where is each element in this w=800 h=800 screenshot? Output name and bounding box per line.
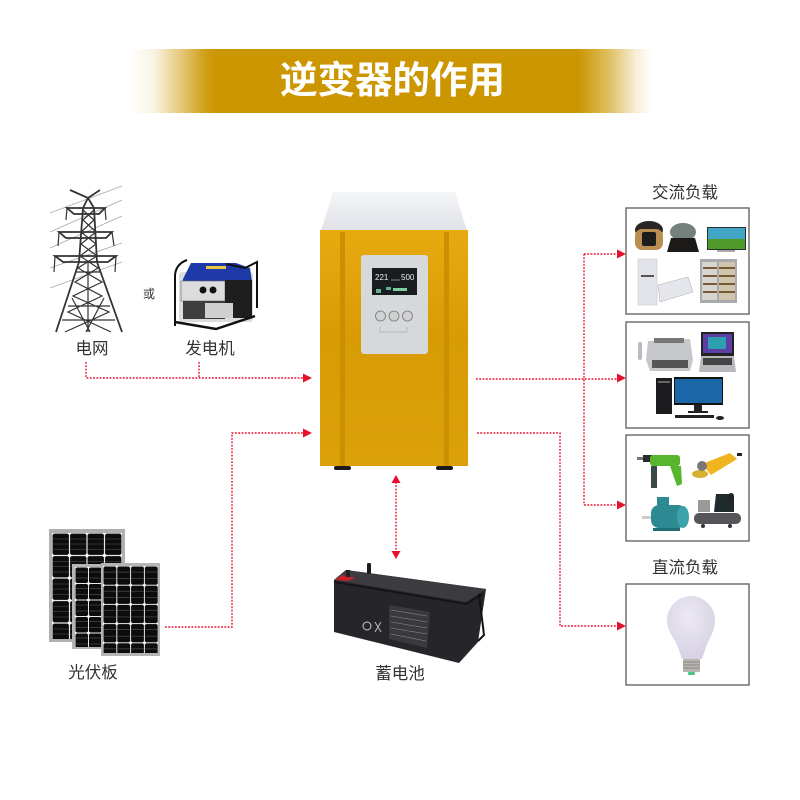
connector: grid and generator to inverter <box>86 362 312 382</box>
title text: 逆变器的作用 <box>280 59 505 101</box>
heading: AC loads: 交流负载 <box>652 183 718 202</box>
icon: light bulb <box>667 596 715 675</box>
icon: transmission tower <box>50 186 122 332</box>
connector: inverter to battery <box>392 475 400 559</box>
icon: rice cooker <box>635 221 663 250</box>
icon: air conditioner <box>638 259 693 305</box>
connector: solar panels to inverter <box>165 428 312 627</box>
label: 发电机: 发电机 <box>185 339 235 358</box>
panel: household appliances <box>626 208 749 314</box>
panel: power tools <box>626 435 749 541</box>
icon: electric motor <box>642 497 689 531</box>
connector: inverter to AC loads <box>476 250 626 510</box>
LCD screen: 500 <box>401 273 415 282</box>
heading: DC load: 直流负载 <box>652 558 718 577</box>
connector: inverter to DC load <box>477 433 626 630</box>
inverter top <box>321 192 467 231</box>
icon: air compressor <box>694 493 741 528</box>
inverter front <box>320 230 468 466</box>
LCD screen <box>372 268 417 295</box>
panel: light bulb <box>626 584 749 685</box>
label: 电网: 电网 <box>76 339 108 358</box>
control panel <box>361 255 428 354</box>
label: 或: 或 <box>143 287 155 301</box>
icon: fax machine <box>638 338 693 371</box>
icon: television <box>707 227 746 252</box>
icon: electric drill <box>637 455 682 488</box>
panel: office electronics <box>626 322 749 428</box>
icon: desktop computer <box>656 377 724 420</box>
icon: refrigerator <box>700 259 737 303</box>
inverter <box>320 192 468 470</box>
icon: battery <box>334 563 486 663</box>
icon: laptop <box>699 332 736 372</box>
label: 蓄电池: 蓄电池 <box>375 664 425 683</box>
icon: solar panels <box>49 529 160 656</box>
label: 光伏板: 光伏板 <box>68 663 118 682</box>
icon: angle grinder <box>692 453 742 478</box>
LCD screen: 221 <box>375 273 389 282</box>
title banner <box>127 49 652 113</box>
icon: generator <box>175 260 257 329</box>
icon: induction cooker <box>667 223 699 252</box>
inverter feet <box>334 466 453 470</box>
panel buttons <box>376 311 412 321</box>
